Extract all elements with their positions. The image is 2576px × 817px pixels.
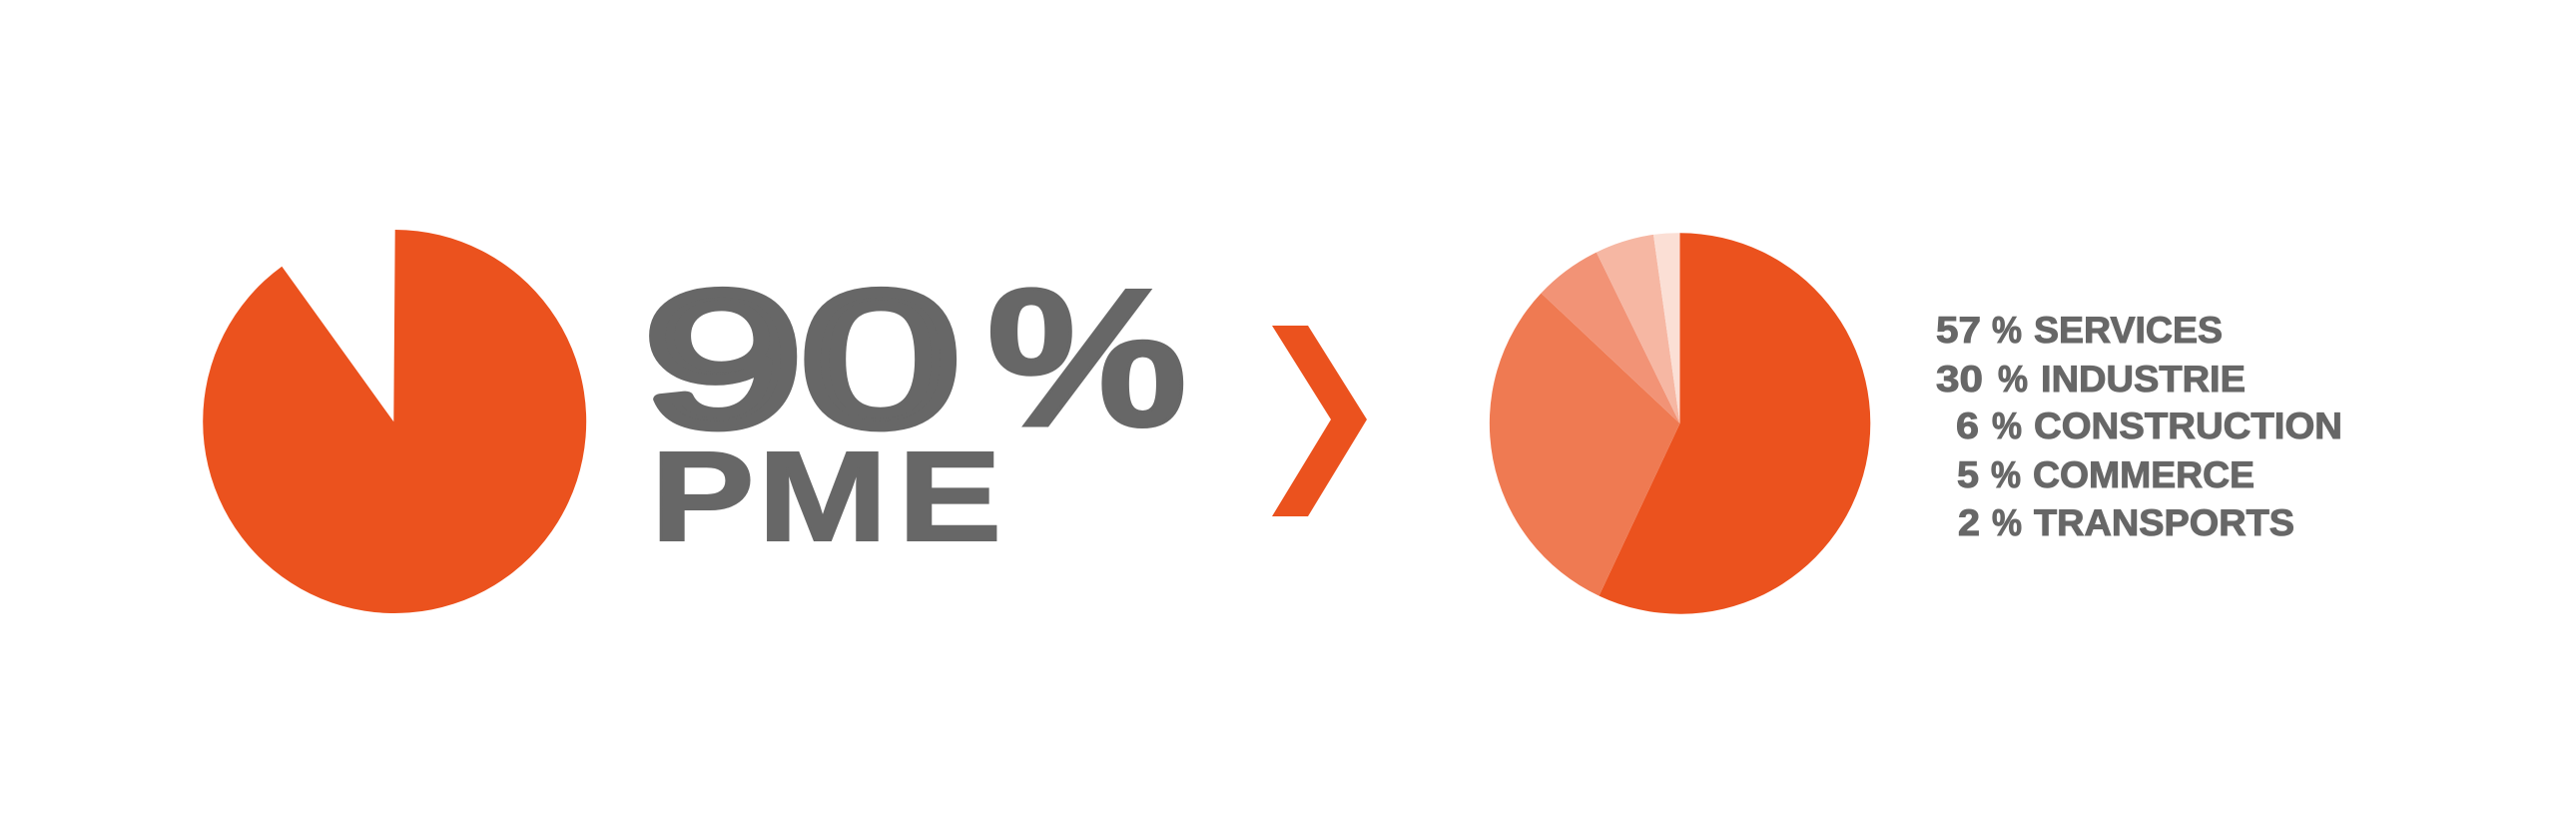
pie chart: sectors: [1490, 233, 1870, 614]
arrow: chevron: [1272, 326, 1367, 516]
legend row: 57 % services: %: [1992, 310, 2022, 351]
legend row: 6 % construction: 6: [1956, 406, 1979, 446]
legend row: 30 % industrie: 30: [1936, 359, 1983, 400]
heading: 90 %: 90: [644, 254, 960, 465]
slice: services 57 %: [1600, 233, 1870, 614]
pie chart: 90 % share: [203, 230, 586, 613]
legend row: 6 % construction: CONSTRUCTION: [2034, 406, 2342, 446]
heading: 90 %: [644, 248, 1187, 467]
legend row: 57 % services: SERVICES: [2034, 310, 2223, 351]
legend row: 2 % transports: %: [1992, 502, 2022, 543]
legend row: 30 % industrie: [1936, 359, 2246, 400]
legend row: 57 % services: 57: [1936, 310, 1981, 351]
legend row: 5 % commerce: %: [1991, 454, 2021, 495]
legend row: 2 % transports: TRANSPORTS: [2034, 502, 2294, 543]
slice: commerce 5 %: [1597, 235, 1679, 423]
heading: 90 %: %: [986, 248, 1187, 467]
legend row: 30 % industrie: INDUSTRIE: [2041, 359, 2246, 400]
legend row: 6 % construction: %: [1992, 406, 2022, 446]
heading: PME: PME: [650, 425, 1001, 568]
legend: sector list: [1936, 310, 2342, 543]
legend row: 5 % commerce: 5: [1957, 454, 1979, 495]
legend row: 30 % industrie: %: [1998, 359, 2028, 400]
legend row: 57 % services: [1936, 310, 2223, 351]
legend row: 2 % transports: 2: [1958, 502, 1980, 543]
slice: transports 2 %: [1653, 233, 1679, 423]
legend row: 5 % commerce: COMMERCE: [2033, 454, 2254, 495]
slice: construction 6 %: [1542, 253, 1679, 423]
slice: industrie 30 %: [1490, 294, 1679, 596]
